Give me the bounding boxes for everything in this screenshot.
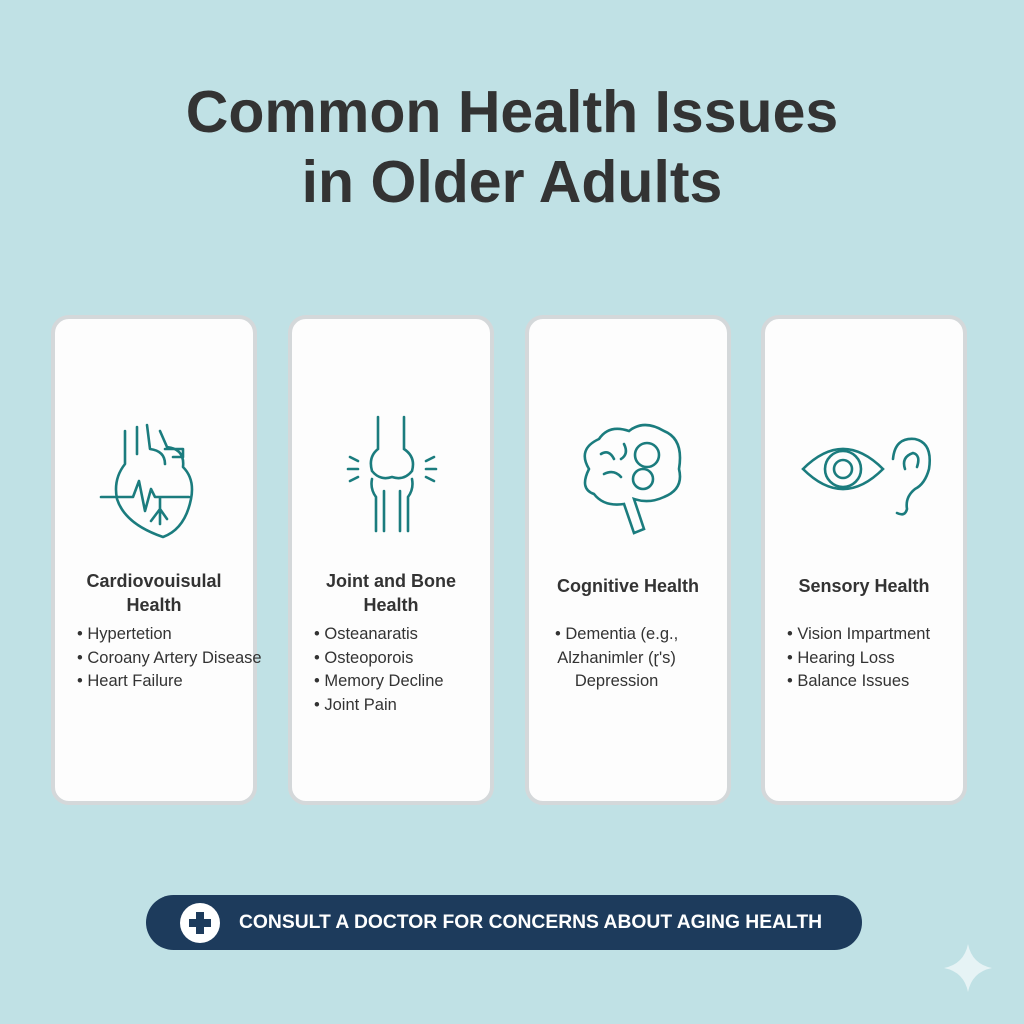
list: • Joint Pain	[314, 696, 397, 714]
list: • Dementia (e.g.,	[555, 625, 678, 643]
list	[314, 625, 444, 714]
icon: heart	[100, 424, 194, 538]
list	[555, 625, 678, 690]
title	[186, 79, 838, 215]
panel: cognitive	[525, 315, 731, 805]
icon: knee joint	[346, 416, 438, 532]
heading	[86, 571, 222, 615]
icon: sparkle	[944, 944, 992, 992]
list: • Balance Issues	[787, 672, 909, 690]
title: Common Health Issues	[186, 79, 838, 145]
icon: plus circle	[180, 903, 220, 943]
heading: Health	[126, 595, 182, 615]
callout text: CONSULT A DOCTOR FOR CONCERNS ABOUT AGING HEALTH	[239, 912, 822, 933]
list: • Osteanaratis	[314, 625, 418, 643]
heading: Cardiovouisulal	[86, 571, 222, 591]
list: • Heart Failure	[77, 672, 183, 690]
list	[77, 625, 262, 690]
title: in Older Adults	[302, 149, 722, 215]
callout button	[146, 895, 862, 950]
list: • Vision Impartment	[787, 625, 930, 643]
list: Alzhanimler (ɽ's)	[557, 648, 676, 666]
icon: eye and ear	[801, 438, 932, 516]
heading: Cognitive Health	[557, 576, 699, 596]
panel: joint and bone	[288, 315, 494, 805]
heading: Joint and Bone	[326, 571, 456, 591]
list: • Osteoporois	[314, 648, 413, 666]
list: Depression	[575, 672, 658, 690]
list: • Coroany Artery Disease	[77, 648, 262, 666]
panel: sensory	[761, 315, 967, 805]
list: • Memory Decline	[314, 672, 444, 690]
list: • Hearing Loss	[787, 648, 895, 666]
heading: Health	[363, 595, 418, 615]
panel: cardiovascular	[51, 315, 257, 805]
icon: brain with gears	[583, 424, 682, 535]
list	[787, 625, 930, 690]
heading: Sensory Health	[798, 576, 930, 596]
heading	[326, 571, 456, 615]
list: • Hypertetion	[77, 625, 172, 643]
